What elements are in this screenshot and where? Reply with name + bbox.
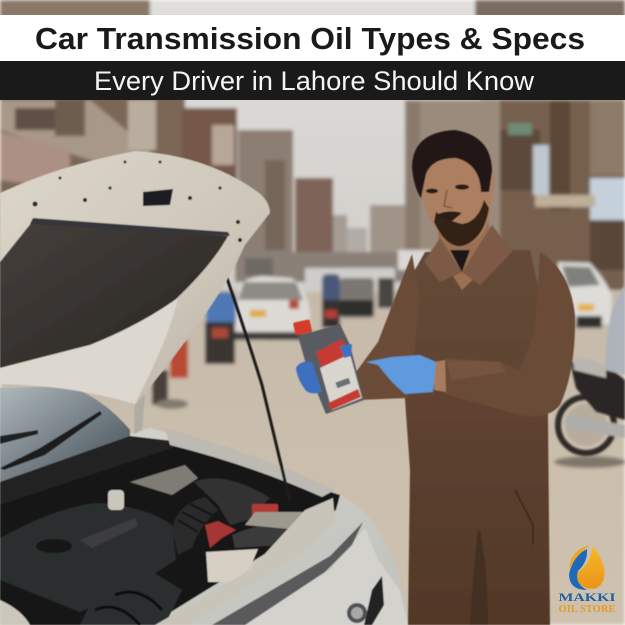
right hand pointing glove	[366, 355, 436, 394]
wipers	[0, 411, 102, 470]
cowl panel	[0, 436, 182, 520]
engine bay	[0, 446, 340, 625]
hood seal	[30, 218, 230, 236]
white lower lip	[0, 298, 178, 404]
left hand glove	[296, 344, 352, 393]
near arm	[356, 254, 420, 400]
car body and fender	[0, 428, 408, 625]
engine cover	[0, 503, 176, 612]
logo subline: OIL STORE	[558, 604, 616, 615]
title: Car Transmission Oil Types & Specs	[35, 21, 585, 56]
hood dark underside	[0, 222, 228, 368]
mechanic	[293, 130, 575, 625]
intake ribs	[80, 497, 218, 625]
ground shadow	[554, 456, 625, 468]
logo wordmark: MAKKI	[558, 590, 616, 604]
head	[412, 130, 495, 246]
radiator support	[155, 498, 335, 625]
pocket	[515, 490, 533, 545]
oil bottle	[293, 319, 364, 414]
hood panel	[0, 151, 270, 405]
car: open hood, windshield and engine bay	[0, 258, 408, 625]
sleeve	[445, 252, 575, 416]
front bumper	[212, 522, 408, 625]
distant traffic	[235, 250, 435, 318]
windshield	[0, 386, 130, 482]
hood vent hole	[143, 189, 173, 206]
dipstick	[220, 258, 290, 502]
white car	[232, 276, 312, 340]
logo: Makki Oil Store	[558, 545, 616, 615]
title band	[0, 15, 625, 61]
center shadow between legs	[470, 530, 488, 625]
reservoirs and red caps	[0, 465, 305, 625]
legs and torso	[398, 250, 550, 625]
collar and neck	[424, 218, 512, 290]
subtitle: Every Driver in Lahore Should Know	[94, 66, 535, 96]
left buildings	[0, 0, 367, 266]
hood raised	[0, 151, 270, 434]
right white car	[558, 262, 612, 328]
air box	[194, 478, 270, 525]
subtitle band	[0, 61, 625, 100]
right buildings	[370, 0, 625, 290]
logo droplet	[569, 545, 605, 590]
fender edge highlight	[165, 428, 335, 497]
motorcycle right	[558, 285, 625, 453]
motorbike riders	[152, 274, 394, 405]
hood strut	[134, 395, 145, 434]
